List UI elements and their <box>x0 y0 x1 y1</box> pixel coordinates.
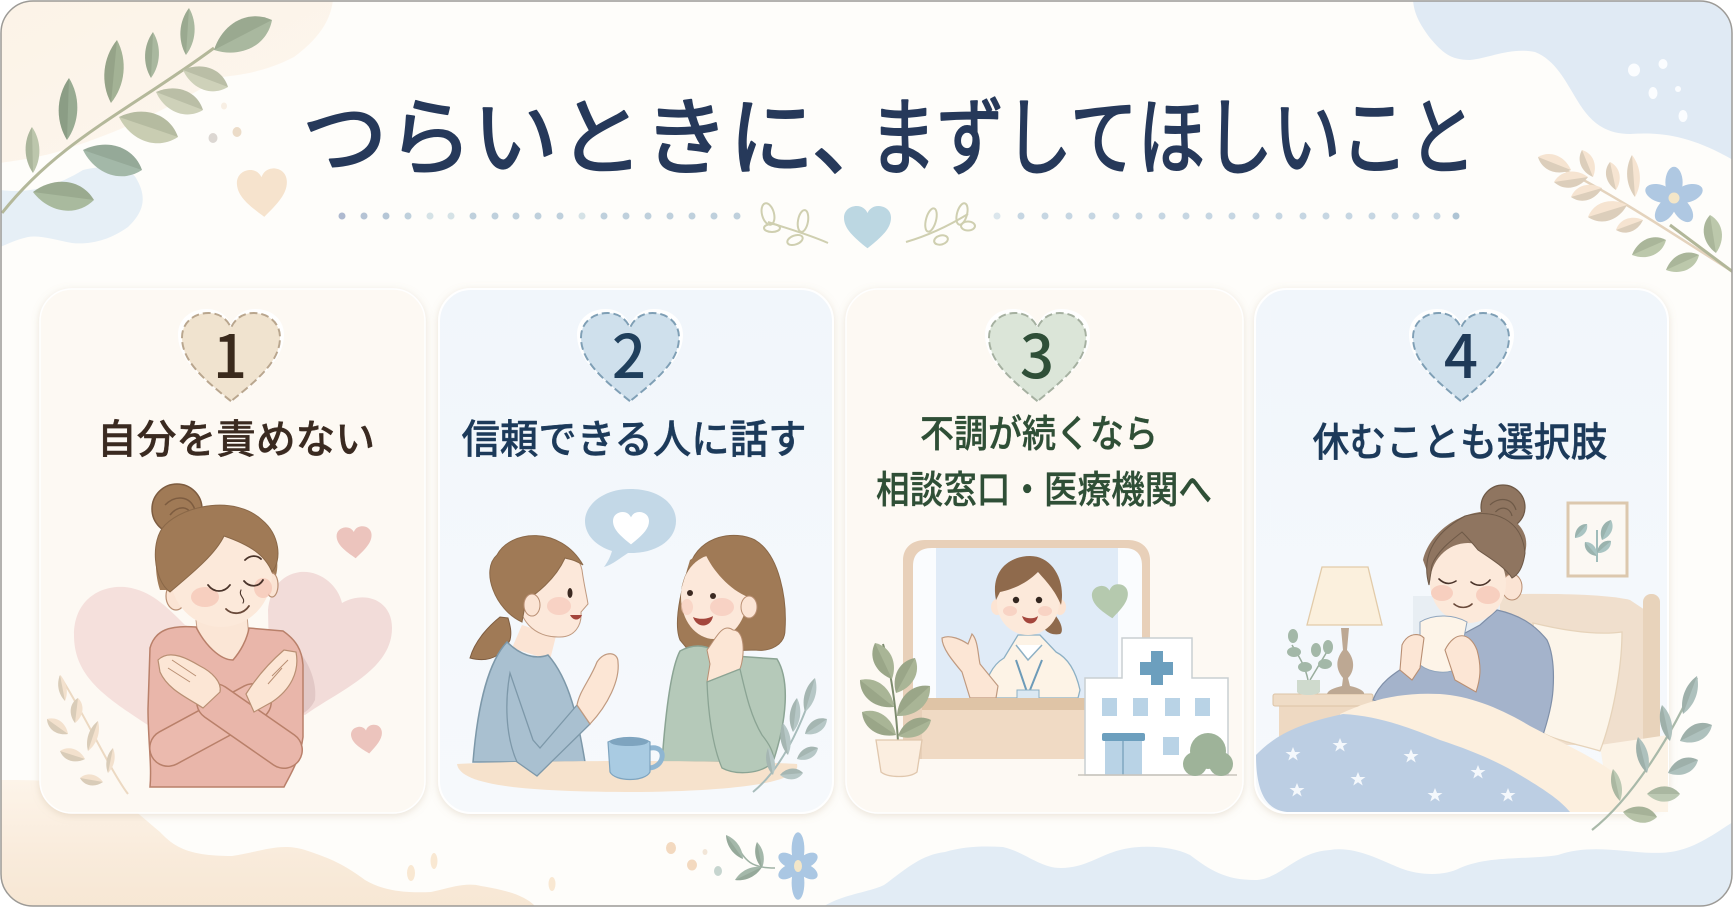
icon: large hearts <box>74 572 392 733</box>
hands <box>1400 635 1424 680</box>
watercolor wash: top left peach <box>0 0 333 163</box>
icon: blue flower <box>1645 166 1703 222</box>
title: まずしてほしいこと <box>869 70 1476 193</box>
sprig <box>753 676 830 792</box>
arm: right person <box>707 669 773 773</box>
badge: heart 2 <box>577 309 683 402</box>
illustration: conversation <box>457 489 830 792</box>
badge: heart 4: 4 <box>1444 309 1478 396</box>
icon: nightstand <box>1273 694 1373 740</box>
icon: speech bubble <box>585 489 676 567</box>
panel: card 2 <box>439 289 833 813</box>
person <box>148 484 303 787</box>
dotted line right <box>994 212 1460 220</box>
icon: plant <box>854 639 937 776</box>
icon: small plant <box>1287 629 1333 695</box>
heading: card 3: 不調が続くなら <box>920 403 1158 458</box>
watercolor wash: bottom left peach <box>0 780 536 907</box>
badge: heart 1 <box>178 309 284 402</box>
branch: top right sprig with flower <box>1535 147 1733 278</box>
bed sheet <box>1600 735 1668 812</box>
mug <box>1420 616 1467 672</box>
branch: top left leaves <box>2 7 279 214</box>
icon: bush <box>1183 733 1233 776</box>
sleeve: under arm <box>168 702 253 748</box>
illustration: consultation desk and hospital <box>854 540 1237 776</box>
title <box>307 96 1466 174</box>
arm: left person <box>507 654 618 776</box>
icon: left sprig <box>759 202 828 247</box>
blanket: starry quilt <box>1256 714 1570 812</box>
illustration: self hug <box>44 484 392 794</box>
title: つらいときに、 <box>302 70 897 193</box>
icon: hospital <box>1078 638 1237 775</box>
watercolor wash: top left blue <box>0 167 143 247</box>
decor: bottom center sprig and flower <box>666 832 820 900</box>
badge: heart 3: 3 <box>1020 309 1054 396</box>
panel: card 1 <box>40 289 425 813</box>
icon: right sprig <box>906 202 975 246</box>
icon: bottom flower <box>776 832 820 900</box>
sprig <box>44 674 128 794</box>
icon: peach heart top left <box>236 168 289 219</box>
cross <box>1140 651 1173 685</box>
hands <box>158 650 297 712</box>
person: staff <box>942 556 1080 699</box>
heading: card 4: 休むことも選択肢 <box>1312 410 1608 468</box>
icon: center heart <box>844 206 891 248</box>
badge: heart 3 <box>985 309 1090 402</box>
sleeve: over arm <box>215 702 284 750</box>
icon: small hearts <box>336 526 385 756</box>
blanket: cream <box>1340 694 1620 812</box>
icon: mug <box>608 738 662 780</box>
dotted line left <box>338 212 740 220</box>
person: right <box>662 535 785 762</box>
decor: small dots top left <box>208 102 242 143</box>
table <box>457 761 797 792</box>
sprig <box>1592 674 1716 830</box>
heading: card 3: 相談窓口・医療機関へ <box>876 459 1212 514</box>
headboard <box>1413 594 1660 745</box>
decor: bottom left dots <box>407 853 556 891</box>
badge: heart 1: 1 <box>213 309 247 396</box>
heading: card 3 <box>876 403 1212 514</box>
heading: card 2: 信頼できる人に話す <box>462 407 806 465</box>
decor: white dots top right <box>1628 59 1688 122</box>
watercolor wash: top right blue <box>1413 0 1733 160</box>
person <box>1373 485 1553 738</box>
heading: card 1: 自分を責めない <box>97 407 375 465</box>
illustration: resting in bed <box>1256 485 1716 830</box>
icon: framed picture <box>1568 503 1627 576</box>
badge: heart 2: 2 <box>612 309 646 396</box>
person: left <box>470 536 588 762</box>
pillow <box>1533 623 1622 751</box>
window frame <box>903 540 1150 759</box>
title divider <box>338 202 1460 248</box>
panel: card 3 <box>846 289 1243 813</box>
counter <box>922 698 1092 759</box>
icon: lamp <box>1307 567 1382 694</box>
watercolor wash: bottom right blue <box>823 822 1733 907</box>
panel: card 4 <box>1255 289 1716 830</box>
icon: heart in window <box>1091 583 1130 620</box>
badge: heart 4 <box>1409 309 1514 402</box>
